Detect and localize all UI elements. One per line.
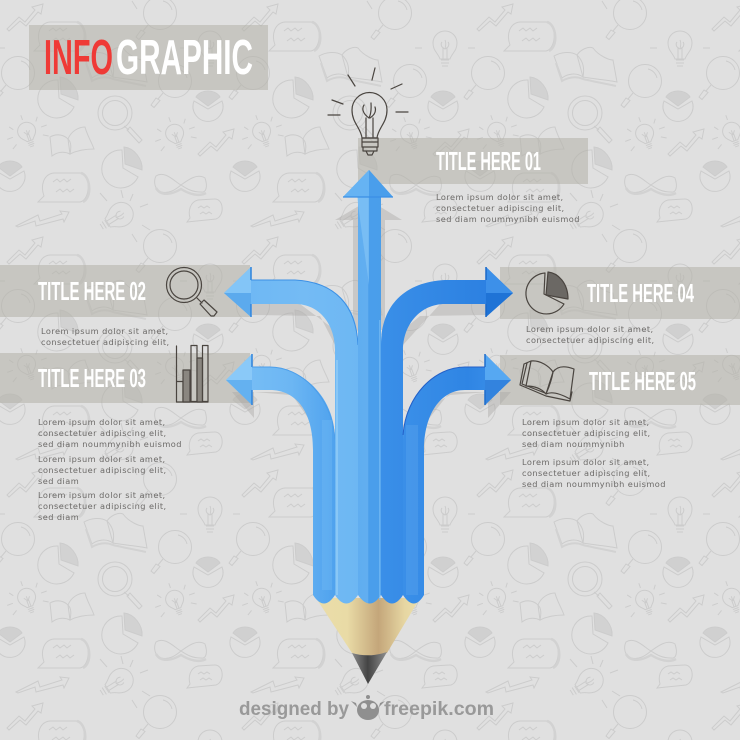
text 03: consectetuer adipiscing elit,: [38, 501, 167, 511]
heading 02: TITLE HERE 02: [38, 276, 146, 306]
text 05: Lorem ipsum dolor sit amet,: [522, 457, 650, 467]
pencil tip wood: [316, 598, 420, 656]
text 03: Lorem ipsum dolor sit amet,: [38, 417, 166, 427]
text 01: consectetuer adipiscing elit,: [436, 203, 565, 213]
arrow shadows: [232, 200, 511, 425]
icon: pie chart: [526, 272, 568, 314]
icon: light bulb: [328, 68, 408, 155]
heading 01: TITLE HERE 01: [436, 146, 541, 176]
icon: magnifier: [166, 268, 217, 316]
title: GRAPHIC: [116, 31, 253, 85]
text 01: Lorem ipsum dolor sit amet,: [436, 192, 564, 202]
heading 03: TITLE HERE 03: [38, 363, 146, 393]
text 03: sed diam: [38, 476, 79, 486]
band: title 02: [0, 265, 250, 317]
text 04: consectetuer adipiscing elit,: [526, 335, 655, 345]
text 05: sed diam noummynibh euismod: [522, 479, 666, 489]
band: title 04: [500, 267, 740, 319]
title: [44, 31, 253, 85]
pencil arrow 02: [224, 267, 358, 604]
text 03: consectetuer adipiscing elit,: [38, 465, 167, 475]
text 05: consectetuer adipiscing elit,: [522, 468, 651, 478]
watermark text: designed by: designed by: [239, 699, 349, 720]
band: title 01: [358, 138, 588, 184]
band: title 03: [0, 353, 250, 403]
text 03: Lorem ipsum dolor sit amet,: [38, 490, 166, 500]
text 03: consectetuer adipiscing elit,: [38, 428, 167, 438]
pencil arrow 05: [403, 354, 511, 604]
text 03: Lorem ipsum dolor sit amet,: [38, 454, 166, 464]
pencil arrow 01: [343, 170, 393, 604]
watermark: [239, 695, 494, 720]
text 03: sed diam: [38, 512, 79, 522]
text 03: sed diam noummynibh euismod: [38, 439, 182, 449]
icon: bar chart: [176, 346, 208, 402]
band: title 05: [500, 355, 740, 405]
pencil arrow 04: [381, 267, 513, 604]
text 04: Lorem ipsum dolor sit amet,: [526, 324, 654, 334]
watermark text: freepik.com: freepik.com: [384, 699, 494, 720]
text 05: sed diam noummynibh: [522, 439, 625, 449]
title band: [29, 25, 268, 90]
title: INFO: [44, 31, 113, 85]
text 05: Lorem ipsum dolor sit amet,: [522, 417, 650, 427]
text 01: sed diam noummynibh euismod: [436, 214, 580, 224]
watermark icon: robot: [351, 695, 385, 720]
pencil arrow 03: [226, 354, 335, 604]
text 02: Lorem ipsum dolor sit amet,: [41, 326, 169, 336]
text 02: consectetuer adipiscing elit,: [41, 337, 170, 347]
text 05: consectetuer adipiscing elit,: [522, 428, 651, 438]
icon: open book: [520, 361, 574, 401]
pencil lead: [352, 652, 387, 684]
